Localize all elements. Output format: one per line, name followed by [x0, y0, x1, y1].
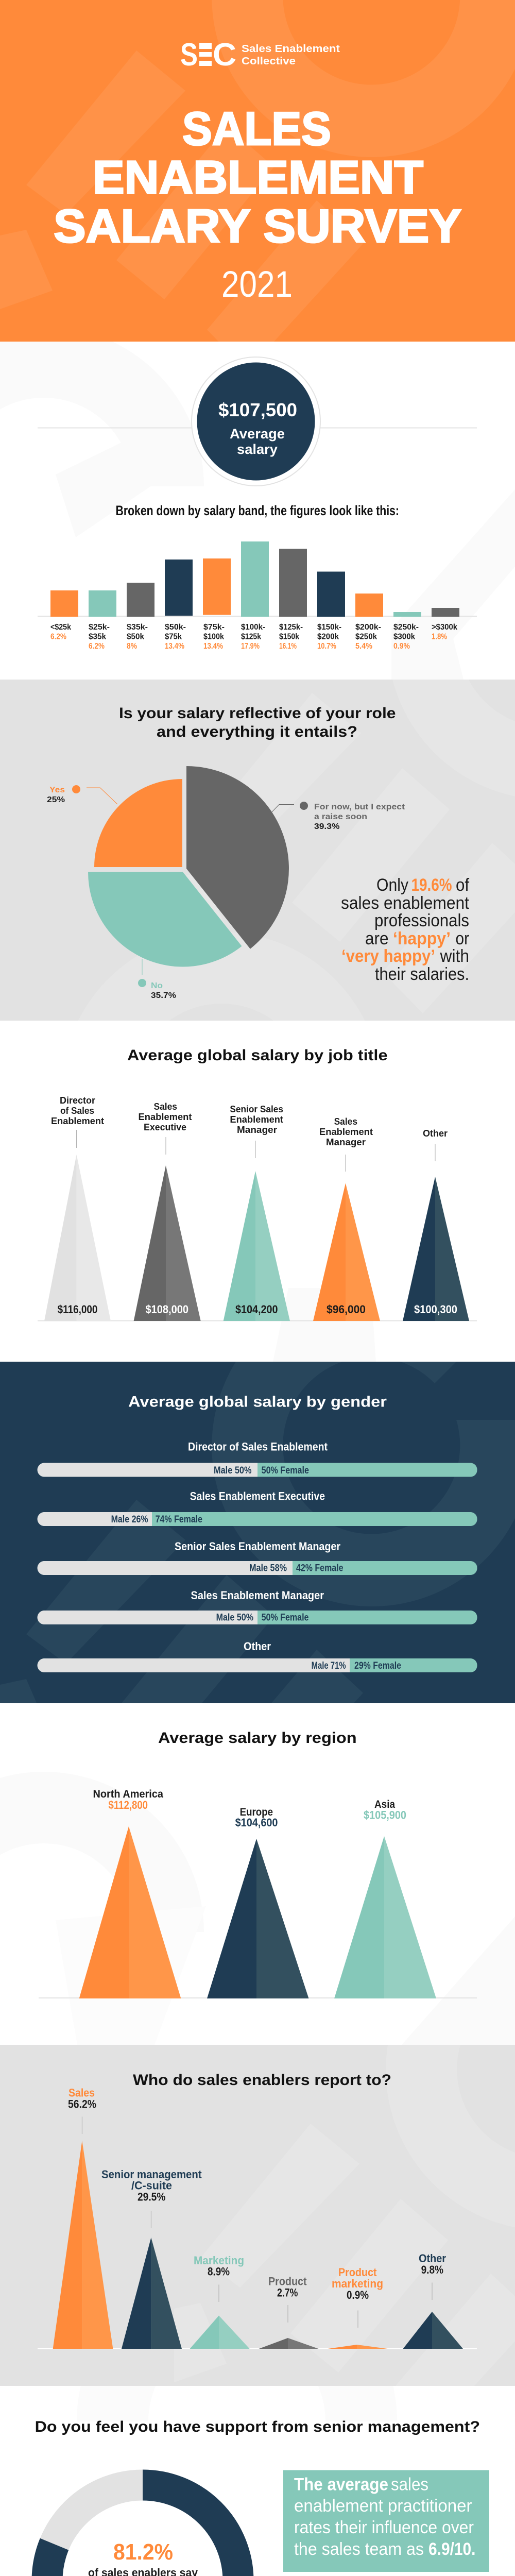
- row: senior manager: 42% Female: [296, 1563, 343, 1573]
- panel: salary by region: [39, 1732, 477, 1998]
- callout: happiness: of: [456, 875, 470, 895]
- row: executive: 74% Female: [156, 1514, 202, 1525]
- triangle: executive: Enablement: [138, 1112, 192, 1122]
- bar labels: $200k: [317, 633, 339, 641]
- heading: [119, 705, 396, 740]
- triangle: product: [259, 2275, 319, 2349]
- triangle: manager: [313, 1116, 380, 1321]
- row: other: [37, 1640, 477, 1672]
- callout: average influence: the sales team as: [294, 2539, 424, 2559]
- callout: happiness: sales enablement: [341, 893, 470, 913]
- triangle: director: [44, 1095, 111, 1321]
- row: other: 29% Female: [354, 1660, 401, 1671]
- triangle: senior management: [101, 2168, 202, 2349]
- callout: happiness: or: [455, 929, 469, 948]
- bar labels: $50k: [127, 633, 144, 641]
- bar labels: <$25k: [50, 623, 71, 632]
- title: SALES: [182, 103, 331, 155]
- triangle: executive: Executive: [144, 1122, 186, 1132]
- row: senior manager: Senior Sales Enablement Manager: [175, 1540, 340, 1553]
- callout: average influence: 6.9/10.: [428, 2539, 476, 2559]
- title: ENABLEMENT: [93, 151, 423, 204]
- triangle: executive: [134, 1101, 201, 1321]
- bar labels: $250k: [355, 633, 377, 641]
- triangle: executive: Sales: [153, 1101, 177, 1112]
- callout: average influence: rates their influence over: [294, 2518, 474, 2537]
- triangle: senior management: Senior management: [101, 2168, 202, 2181]
- callout: happiness: are: [365, 929, 388, 948]
- logo: Sales Enablement Collective: C: [213, 37, 236, 73]
- triangle: marketing: 8.9%: [208, 2265, 230, 2278]
- triangle: product: 2.7%: [277, 2286, 298, 2299]
- triangle: other: Other: [423, 1128, 448, 1139]
- triangle: senior manager: Senior Sales: [230, 1104, 283, 1114]
- heading: Average salary by region: [158, 1730, 357, 1747]
- pie label: yes: [47, 785, 117, 804]
- triangle: manager: $96,000: [327, 1303, 366, 1316]
- triangle: manager: Sales: [334, 1116, 357, 1127]
- triangle: senior manager: Manager: [237, 1125, 277, 1135]
- triangle: senior manager: Enablement: [230, 1114, 283, 1125]
- row: executive: [37, 1490, 477, 1526]
- pie label: for now: a raise soon: [314, 812, 367, 821]
- bar labels: $100k-: [241, 623, 265, 632]
- bar labels: $35k: [89, 633, 106, 641]
- panel: salary by gender: [0, 1362, 515, 1703]
- triangle: marketing: [190, 2254, 250, 2349]
- bar labels: 0.9%: [393, 642, 410, 651]
- bar labels: $125k-: [279, 623, 303, 632]
- pie label: yes: 25%: [47, 795, 65, 804]
- triangle: senior manager: $104,200: [235, 1303, 278, 1316]
- bar labels: $150k-: [317, 623, 341, 632]
- triangle: manager: Enablement: [319, 1127, 373, 1137]
- bar labels: 6.2%: [50, 633, 66, 641]
- heading: Do you feel you have support from senior management?: [35, 2418, 480, 2435]
- bar labels: $25k-: [89, 623, 110, 632]
- triangle: asia: Asia: [374, 1799, 395, 1810]
- bar labels: $200k-: [355, 623, 381, 632]
- callout: average influence: sales: [391, 2475, 428, 2495]
- title: SALARY SURVEY: [54, 200, 461, 252]
- row: director: Male 50%: [214, 1465, 252, 1476]
- bar labels: $100k: [203, 633, 224, 641]
- triangle: product marketing: [328, 2266, 388, 2349]
- triangle: other: [403, 1128, 469, 1321]
- heading: salary band: Broken down by salary band, the figures look like this:: [115, 503, 399, 518]
- triangle: senior management: 29.5%: [138, 2191, 165, 2203]
- triangle: senior manager: [224, 1104, 290, 1321]
- triangle: director: Director: [60, 1095, 95, 1106]
- callout: happiness: professionals: [374, 911, 469, 930]
- row: manager: Sales Enablement Manager: [191, 1589, 324, 1602]
- bar labels: [50, 623, 457, 651]
- callout: happiness: ‘happy’: [393, 929, 451, 948]
- triangle: north america: North America: [93, 1788, 163, 1800]
- row: director: [37, 1440, 477, 1477]
- pie label: for now: 39.3%: [314, 822, 340, 831]
- pie label: yes: Yes: [49, 786, 65, 794]
- pie label: no: [138, 959, 176, 1000]
- bar labels: $125k: [241, 633, 261, 641]
- pie label: for now: [271, 802, 405, 831]
- donut chart: [47, 2485, 238, 2576]
- triangle: product marketing: Product: [338, 2266, 377, 2279]
- bar labels: >$300k: [432, 623, 457, 632]
- title: [54, 103, 461, 252]
- row: manager: Male 50%: [216, 1613, 253, 1623]
- pie chart: [88, 766, 289, 967]
- bar labels: 16.1%: [279, 642, 297, 651]
- triangle: manager: Manager: [326, 1137, 366, 1147]
- heading: Average global salary by job title: [127, 1047, 387, 1064]
- panel: average salary and salary bands: [38, 357, 477, 649]
- row: manager: [37, 1589, 477, 1624]
- triangle: director: Enablement: [51, 1116, 104, 1126]
- bar labels: $150k: [279, 633, 299, 641]
- triangle: executive: $108,000: [145, 1303, 188, 1316]
- logo: Sales Enablement Collective: Collective: [242, 56, 296, 67]
- panel: who sales enablers report to: [0, 2045, 515, 2386]
- bar labels: $35k-: [127, 623, 148, 632]
- triangle: other: 9.8%: [421, 2263, 443, 2276]
- triangle: other: $100,300: [414, 1303, 457, 1316]
- triangle: senior management: /C-suite: [131, 2179, 172, 2192]
- triangle: europe: [207, 1806, 309, 1998]
- triangle: sales: [53, 2087, 113, 2349]
- average salary badge: salary: [237, 442, 278, 457]
- callout: happiness: ‘very happy’: [341, 946, 435, 966]
- bar labels: 8%: [127, 642, 137, 651]
- panel: senior management support: [32, 2420, 489, 2576]
- callout: happiness: [341, 875, 470, 984]
- logo: Sales Enablement Collective: Sales Enablement: [242, 43, 340, 55]
- row: senior manager: Male 58%: [249, 1563, 287, 1573]
- year: 2021: [221, 264, 293, 305]
- triangle: marketing: Marketing: [194, 2254, 244, 2267]
- average salary badge: Average: [230, 426, 285, 442]
- row: other: Other: [244, 1640, 271, 1653]
- bar labels: 17.9%: [241, 642, 260, 651]
- callout: happiness: with: [440, 946, 469, 966]
- bar labels: $75k: [165, 633, 182, 641]
- callout: happiness: Only: [376, 875, 408, 895]
- heading: Average global salary by gender: [128, 1393, 387, 1411]
- callout: happiness: their salaries.: [375, 964, 469, 984]
- heading: Who do sales enablers report to?: [133, 2072, 391, 2089]
- logo: Sales Enablement Collective: S: [180, 37, 198, 73]
- bar labels: $75k-: [203, 623, 225, 632]
- average salary badge: [192, 357, 320, 486]
- triangle: product marketing: 0.9%: [347, 2289, 369, 2301]
- triangle: europe: Europe: [240, 1806, 273, 1818]
- triangle: other: Other: [419, 2252, 446, 2265]
- triangle: director: of Sales: [60, 1106, 94, 1116]
- triangle: asia: [334, 1799, 436, 1998]
- row: director: 50% Female: [262, 1465, 309, 1476]
- heading: Is your salary reflective of your role: [119, 705, 396, 722]
- triangle: director: $116,000: [58, 1303, 97, 1316]
- pie label: no: 35.7%: [151, 991, 176, 1000]
- triangle: north america: $112,800: [108, 1799, 148, 1811]
- callout: average influence: enablement practitioner: [294, 2496, 472, 2516]
- panel: salary by job title: [38, 1049, 477, 1321]
- row: executive: Sales Enablement Executive: [190, 1490, 325, 1502]
- row: senior manager: [37, 1540, 477, 1575]
- triangle: other: [403, 2252, 463, 2349]
- bar labels: 5.4%: [355, 642, 372, 651]
- triangle: product: Product: [268, 2275, 307, 2287]
- average salary badge: $107,500: [218, 399, 297, 420]
- triangle: product marketing: marketing: [332, 2277, 383, 2290]
- bar labels: 1.8%: [432, 633, 447, 641]
- triangle: sales: Sales: [68, 2087, 95, 2099]
- triangle: europe: $104,600: [235, 1816, 278, 1829]
- bar labels: 13.4%: [203, 642, 223, 651]
- callout: happiness: 19.6%: [411, 875, 452, 895]
- row: manager: 50% Female: [262, 1613, 309, 1623]
- bar labels: 6.2%: [89, 642, 105, 651]
- bar labels: $250k-: [393, 623, 419, 632]
- logo: Sales Enablement Collective: [180, 37, 340, 73]
- callout: average influence: [283, 2470, 489, 2572]
- donut chart: 81.2%: [113, 2539, 173, 2565]
- row: executive: Male 26%: [111, 1514, 148, 1525]
- heading: and everything it entails?: [157, 723, 357, 740]
- triangle: sales: 56.2%: [68, 2098, 96, 2110]
- triangle: north america: [79, 1788, 181, 1998]
- bar chart: salary band: [38, 541, 477, 617]
- triangle: asia: $105,900: [364, 1808, 406, 1822]
- bar labels: 10.7%: [317, 642, 336, 651]
- bar labels: 13.4%: [165, 642, 184, 651]
- pie label: no: No: [151, 981, 163, 990]
- callout: average influence: The average: [294, 2475, 388, 2495]
- bar labels: $50k-: [165, 623, 186, 632]
- pie label: for now: For now, but I expect: [314, 803, 405, 811]
- row: director: Director of Sales Enablement: [188, 1440, 328, 1453]
- bar labels: $300k: [393, 633, 415, 641]
- panel: header: [0, 0, 515, 371]
- panel: salary reflective of role: [0, 680, 515, 1021]
- row: other: Male 71%: [312, 1660, 346, 1671]
